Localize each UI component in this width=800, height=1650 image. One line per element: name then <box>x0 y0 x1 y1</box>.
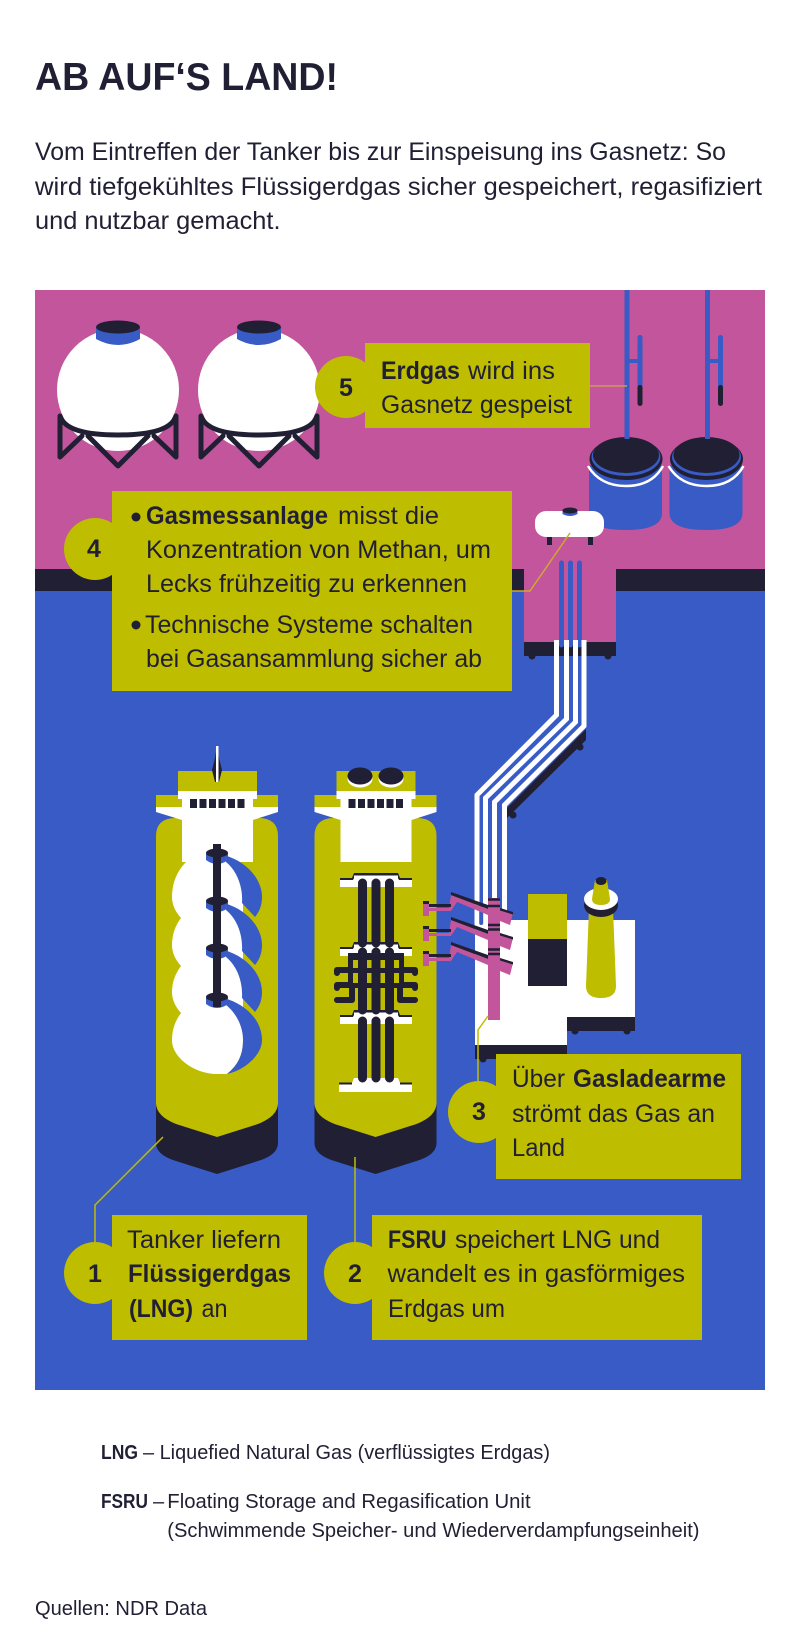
callout 4: misst die <box>338 502 439 530</box>
water area <box>35 591 765 1390</box>
callout 2: Erdgas um <box>388 1295 505 1323</box>
callout 3: Gasladearme <box>573 1065 726 1093</box>
tanker ship <box>156 745 278 1174</box>
intro text: und nutzbar gemacht. <box>35 207 280 235</box>
onshore platform <box>475 894 635 1062</box>
quay edge <box>35 569 765 591</box>
glossary: (Schwimmende Speicher- und Wiederverdampfungseinheit) <box>167 1520 700 1542</box>
callout 4: Technische Systeme schalten <box>145 611 473 639</box>
callout 1: (LNG) <box>129 1295 193 1323</box>
land area <box>35 290 765 569</box>
connector lines <box>95 386 627 1242</box>
regasification pipes <box>337 873 415 1092</box>
loading arms <box>423 892 513 1020</box>
callout 2 <box>324 1215 702 1340</box>
callout 1 <box>64 1215 307 1340</box>
callout 3: strömt das Gas an <box>512 1100 715 1128</box>
gas measuring tank <box>535 508 604 545</box>
callout 5: wird ins <box>467 357 555 385</box>
intro text <box>34 138 762 235</box>
flare stack <box>584 877 618 998</box>
glossary: – <box>153 1491 165 1513</box>
callout 4: Gasmessanlage <box>146 502 328 530</box>
callout 5 <box>315 343 590 428</box>
callout 4: Lecks frühzeitig zu erkennen <box>146 570 467 598</box>
callout 1: an <box>202 1295 228 1323</box>
glossary <box>101 1442 700 1542</box>
jetty <box>524 563 616 660</box>
callout 2: speichert LNG und <box>455 1226 660 1254</box>
glossary: LNG <box>101 1442 138 1464</box>
storage spheres <box>57 320 320 466</box>
callout 2: FSRU <box>388 1226 446 1254</box>
LNG spheres <box>172 844 262 1074</box>
pipelines <box>477 640 586 930</box>
callout 4: Konzentration von Methan, um <box>146 536 491 564</box>
callout 1: Flüssigerdgas <box>128 1260 291 1288</box>
callout 2: wandelt es in gasförmiges <box>386 1260 685 1288</box>
callout 5: Erdgas <box>381 357 460 385</box>
callout 1: 1 <box>88 1260 102 1288</box>
source: Quellen: NDR Data <box>35 1598 208 1620</box>
intro text: wird tiefgekühltes Flüssigerdgas sicher gespeichert, regasifiziert <box>34 173 762 201</box>
callout 4: bei Gasansammlung sicher ab <box>146 645 482 673</box>
callout 3: Über <box>512 1065 565 1093</box>
panel: scene <box>35 290 765 1390</box>
callout 3: 3 <box>472 1098 486 1126</box>
glossary: Floating Storage and Regasification Unit <box>167 1491 531 1513</box>
title: AB AUF‘S LAND! <box>35 56 338 99</box>
glossary: – Liquefied Natural Gas (verflüssigtes Erdgas) <box>143 1442 550 1464</box>
callout 4: 4 <box>87 535 101 563</box>
callout 2: 2 <box>348 1260 362 1288</box>
storage tanks with gas network pipes <box>588 290 744 530</box>
callout 5: Gasnetz gespeist <box>381 391 572 419</box>
callout 3: Land <box>512 1134 565 1162</box>
callout 1: Tanker liefern <box>127 1226 281 1254</box>
callout 4 <box>64 491 512 691</box>
callout 5: 5 <box>339 374 353 402</box>
intro text: Vom Eintreffen der Tanker bis zur Einspeisung ins Gasnetz: So <box>35 138 726 166</box>
FSRU ship <box>314 768 436 1174</box>
callout 3 <box>448 1054 741 1179</box>
deck funnels <box>348 768 404 788</box>
glossary: FSRU <box>101 1491 148 1513</box>
